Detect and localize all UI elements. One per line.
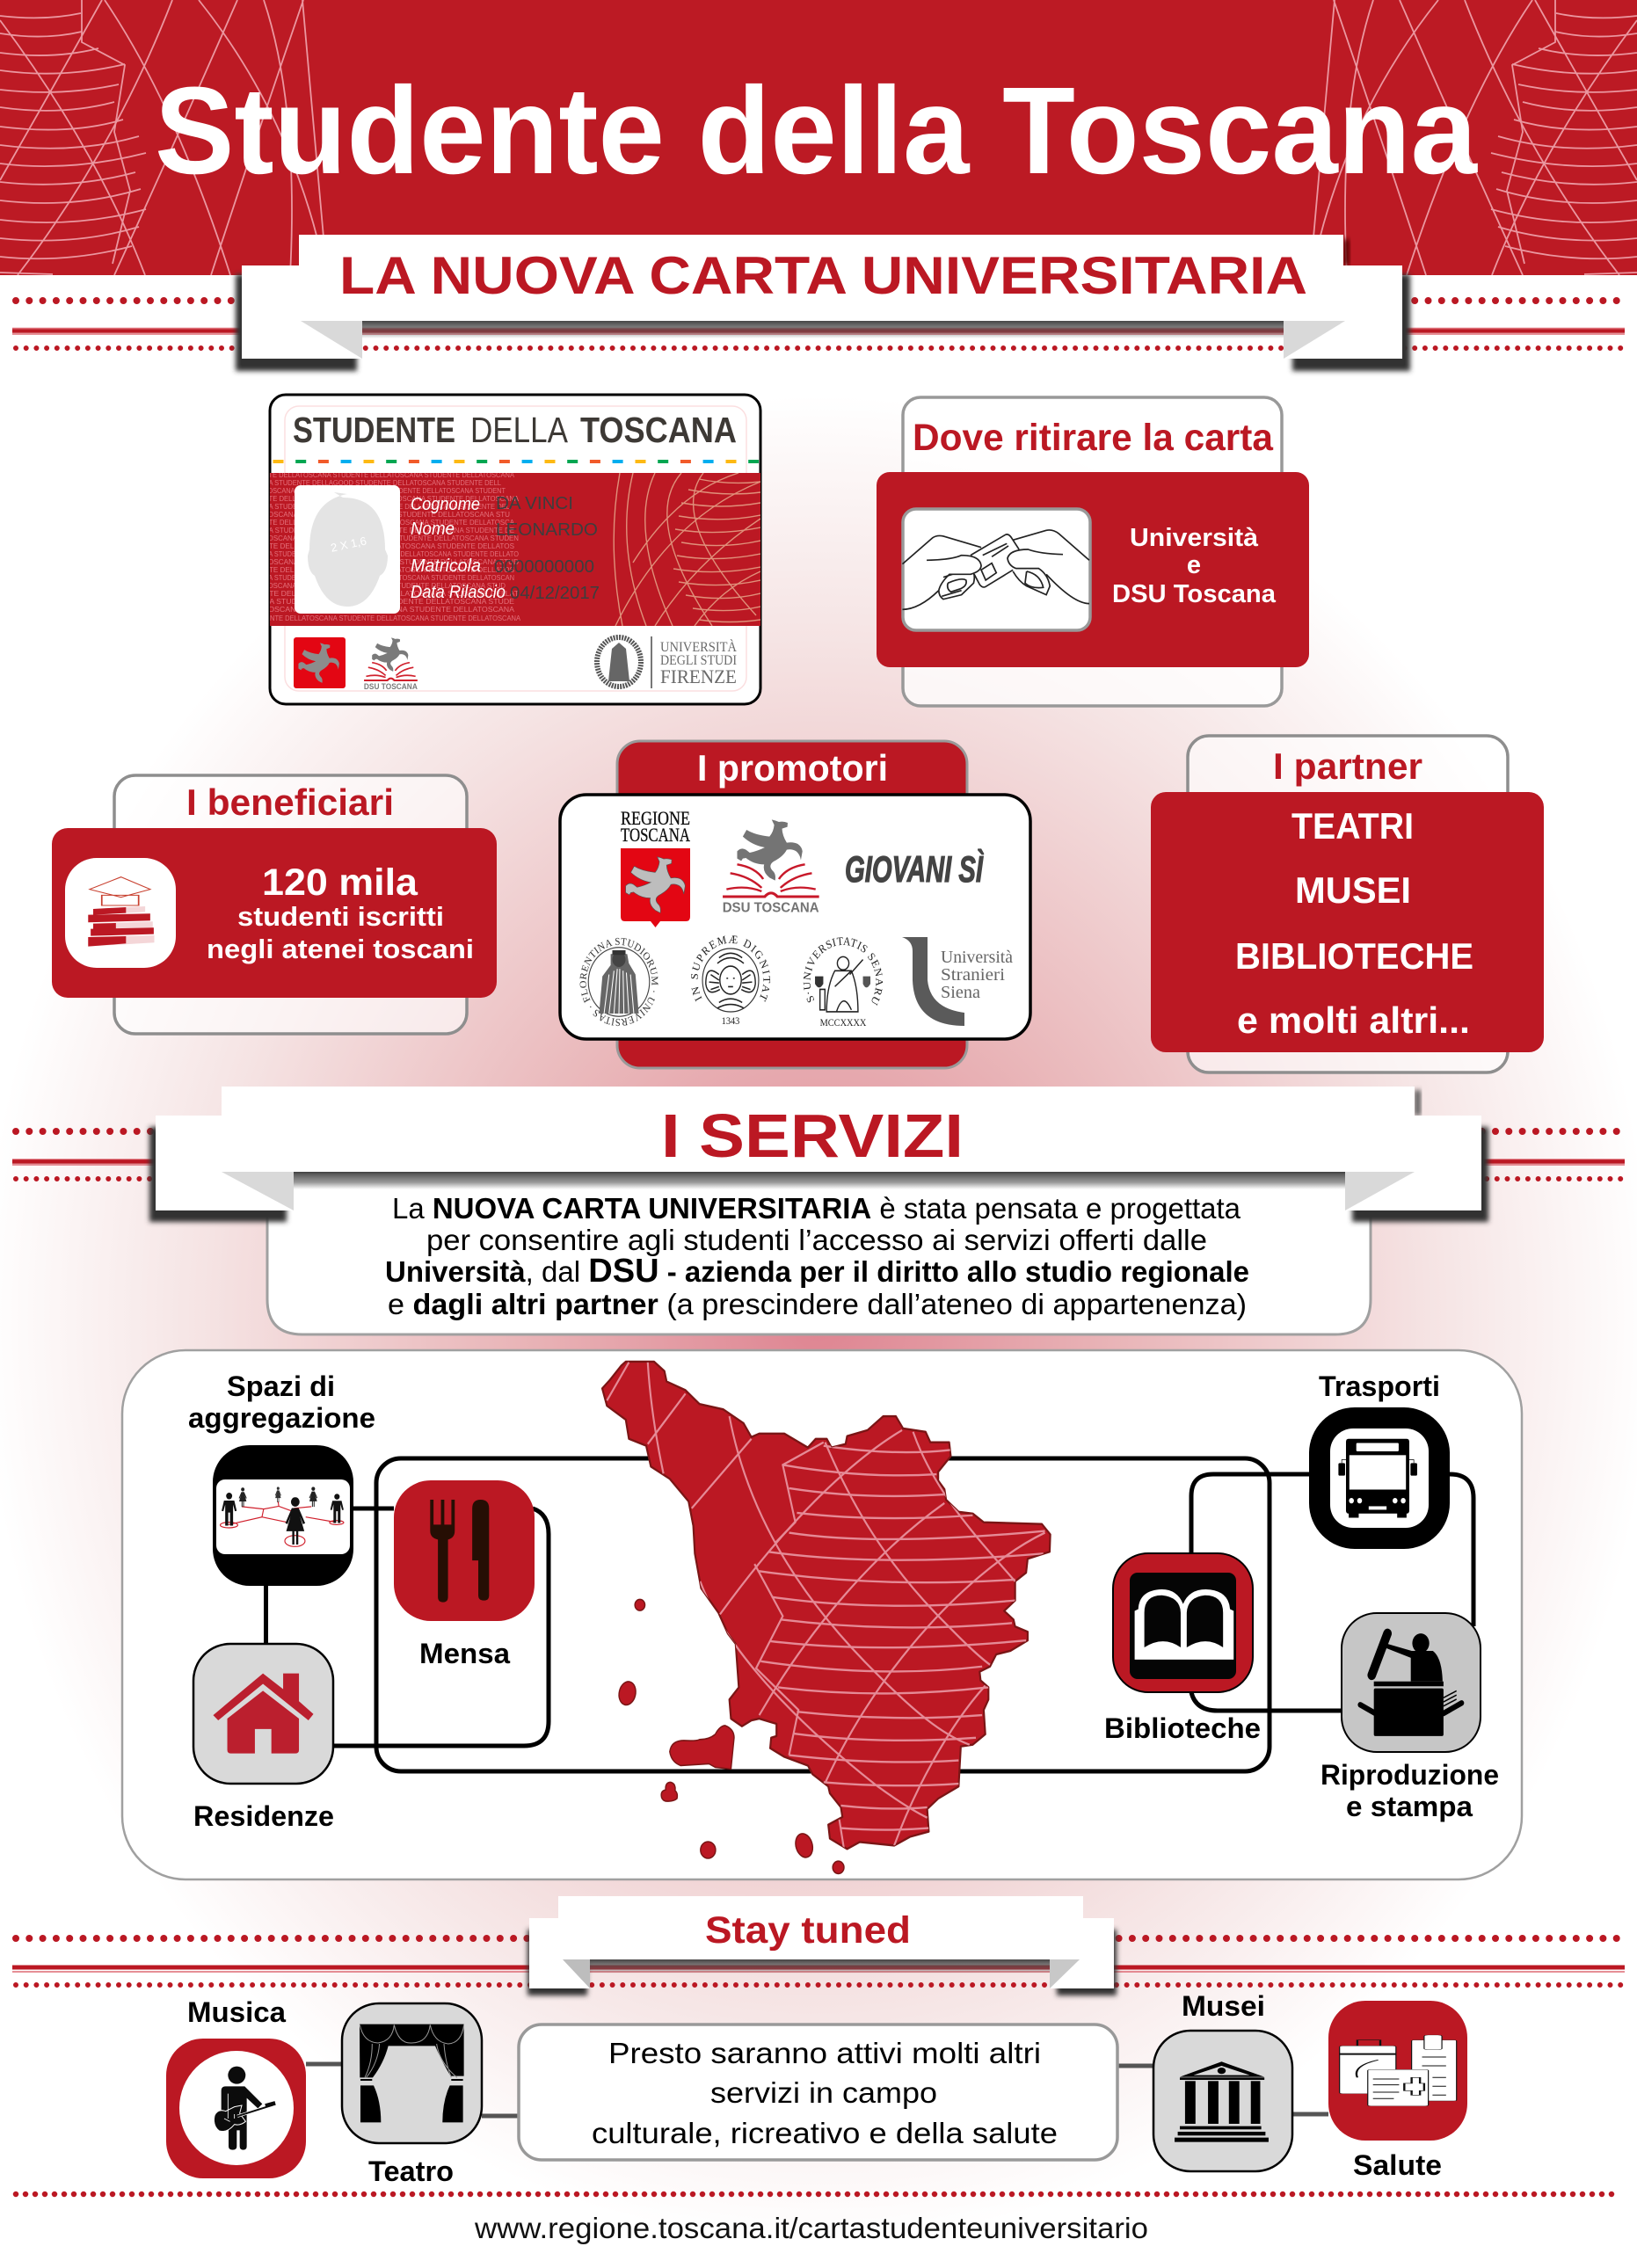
banner: stay tuned: Stay tuned [705,1909,911,1952]
service: musei [1153,1990,1292,2171]
service: mensa [394,1480,535,1669]
service: salute [1328,2001,1467,2181]
card heading [293,410,737,450]
service: spazi di aggregazione: Spazi di [227,1370,335,1402]
card heading: TOSCANA [580,410,737,450]
callout: presto saranno attivi [519,2024,1117,2160]
card fields [411,494,600,603]
logo: universita stranieri siena: Siena [941,983,980,1002]
card microtext: NTE DELLATOSCANA STUDENTE DELLATOSCANA STUDENTE DELLATOS [264,542,514,550]
logo: regione toscana [621,807,690,927]
card logo: dsu toscana [364,637,418,691]
logo: seal siena: S·UNIVERSITATIS SENARUM [804,937,883,1006]
card globe pattern [614,473,760,626]
card microtext: NTE DELLATOSCANA STUDENTE DELLATOSCANA STUDENTE DELLATOSCANA [264,471,515,479]
connectors [266,1458,1473,1771]
icon: hands holding card [902,509,1090,630]
card heading: STUDENTE [293,410,455,450]
card microtext: TOSCANA STUDENTE DELLATOSCANA STUDENTE DELLATOSCANA STUD [264,558,519,566]
callout: presto saranno attivi: servizi in campo [710,2076,937,2109]
panel: i partner: TEATRI [1291,805,1414,847]
service: teatro: Teatro [368,2155,454,2187]
service: mensa: Mensa [419,1638,510,1669]
panel: i beneficiari: 120 mila [262,861,418,904]
panel: services map [122,1350,1522,1879]
panel: i partner [1151,736,1544,1072]
text panel: nuova carta description: Università, dal DSU - azienda per il diritto allo studio regionale [385,1253,1249,1290]
banner: la nuova carta universitaria: LA NUOVA CARTA UNIVERSITARIA [339,246,1307,305]
service: trasporti [1309,1370,1450,1549]
card logo: regione [294,637,346,688]
panel: i partner: BIBLIOTECHE [1235,935,1473,977]
banner: i servizi: I SERVIZI [661,1101,964,1170]
banner: i servizi [149,1087,1488,1222]
card microtext: TOSCANA STUDENTE DELLATOSCANA STUDENTE DELLATOSCANA STUDENT [264,487,506,495]
header band [0,0,1637,275]
panel: dove ritirare la carta: Dove ritirare la carta [913,417,1274,459]
logo: seal firenze: FLORENTINA STUDIORUM · UNIVERSITAS · [580,937,658,1027]
service: musica: Musica [187,1996,286,2028]
logo: dsu toscana [723,819,819,916]
panel: i beneficiari: negli atenei toscani [207,934,474,964]
card microtext [264,471,521,622]
card fields: LEONARDO [496,520,598,540]
logo: seal siena: MCCXXXX [820,1017,866,1029]
service: riproduzione e stampa: e stampa [1346,1791,1473,1822]
map of toscana [602,1362,1051,1873]
logo: seal pisa [691,935,770,1027]
card heading: DELLA [470,410,569,450]
callout: presto saranno attivi: Presto saranno attivi molti altri [608,2037,1041,2069]
card fields: 04/12/2017 [510,584,600,603]
service: spazi di aggregazione: aggregazione [188,1402,375,1434]
panel: i beneficiari [52,775,497,1034]
service: musei: Musei [1182,1990,1265,2022]
card microtext: NA STUDENTE DELLATOSCANA STUDENTE DELLATOSCANA STUDENTE DE [264,527,514,534]
logo: seal pisa: IN SUPREMÆ DIGNITATIS [691,935,770,1002]
logo: giovani si: GIOVANI SÌ [845,848,984,890]
text panel: nuova carta description: per consentire agli studenti l’accesso ai servizi offerti dalle [426,1224,1207,1256]
callout: presto saranno attivi: culturale, ricreativo e della salute [592,2117,1058,2149]
service: riproduzione e stampa [1321,1613,1499,1822]
title: Studente della Toscana [155,61,1479,200]
card microtext: NA STUDENTE DELLATOSCANA STUDENTE DELLATOSCANA STUDENTE DEL [264,503,511,511]
text panel: nuova carta description: e dagli altri partner (a prescindere dall’ateneo di appartenenza) [388,1288,1247,1320]
panel: i promotori [558,740,1032,1069]
service: musica [166,1996,306,2178]
logo: universita stranieri siena: Università [941,948,1013,967]
card fields: DA VINCI [496,494,573,513]
panel: dove ritirare la carta: Università [1130,524,1259,552]
card microtext: NA STUDENTE DELLAGOOD STUDENTE DELLATOSCANA STUDENTE DELL [264,479,502,487]
banner: stay tuned [527,1896,1117,1995]
service: spazi di aggregazione [188,1370,375,1586]
logo: regione toscana: REGIONE [621,807,690,829]
panel: dove ritirare la carta [877,397,1309,706]
card microtext: NTE DELLATOSCANA STUDENTE DELLATOSCANA STUDENTE DELLAT [264,590,519,598]
card microtext: NA STUDENTE DELLATOSCANA STUDENTE DELLATOSCANA STUDE [264,598,514,606]
service: residenze: Residenze [193,1800,334,1832]
card logo: universita firenze [597,636,738,688]
panel: i promotori: I promotori [697,747,888,789]
panel: i partner: MUSEI [1295,869,1411,911]
logo: universita stranieri siena: Stranieri [941,965,1005,985]
card microtext: NA STUDENTE DELLATOSCANA STUDENTE DELLATOSCANA STUDENTE DELLATO [264,550,519,558]
card logo: dsu toscana: DSU TOSCANA [364,682,418,691]
card photo placeholder [295,485,400,614]
service: teatro [342,2003,482,2187]
student card [264,395,760,704]
card microtext: TOSCANA STUDENTE DELLATOSCANA STUDENTE DELLATOSCANA STUD [264,582,506,590]
panel: dove ritirare la carta: DSU Toscana [1112,580,1277,608]
logo: dsu toscana: DSU TOSCANA [723,901,819,916]
panel: i beneficiari: studenti iscritti [237,901,444,932]
panel: dove ritirare la carta: e [1187,551,1201,579]
card microtext: NA STUDENTE MBGOOD STUDENTE DELLATOSCANA STUDENTE DELLATOSCAN [264,574,514,582]
logo: regione toscana: TOSCANA [621,824,690,846]
card logo: universita firenze: DEGLI STUDI [660,653,737,668]
banner: la nuova carta universitaria [236,235,1410,371]
card microtext: NTE DELLATOSCANA STUDENTE DELLATOSCANA STUDENTE DELLATOSCANA [264,495,520,503]
service: residenze [193,1644,334,1832]
card logo: universita firenze: FIRENZE [660,665,737,687]
logo: universita stranieri siena [902,937,1013,1026]
card microtext: NTE DELLATOSCANA STUDENTE DELLATOSCANA STUDENTE DELLATOSCANA [270,614,521,622]
card logo: universita firenze: UNIVERSITÀ [660,640,738,655]
panel: i beneficiari: I beneficiari [186,781,394,823]
service: biblioteche [1104,1553,1261,1744]
service: biblioteche: Biblioteche [1104,1712,1261,1744]
text panel: nuova carta description [267,1172,1371,1334]
card fields: Cognome [411,495,480,514]
card photo placeholder: 2 X 1,6 [330,534,367,555]
service: riproduzione e stampa: Riproduzione [1321,1759,1499,1791]
service: salute: Salute [1353,2149,1442,2181]
card microtext: NTE DELLATOSCANA STUDENTE DELLATOSCANA STUDENTE DELLATOSCA [264,519,515,527]
card microtext: TOSCANA STUDENTE DELLATOSCANA STUDENTE DELLATOSCANA STUDEN [264,534,519,542]
card fields: Nome [411,520,455,539]
text panel: nuova carta description: La NUOVA CARTA UNIVERSITARIA è stata pensata e progettata [392,1192,1241,1225]
card microtext: TOSCANA STUDENTE DELLATOSCANA STUDENTE DELLATOSCANA STU [264,511,510,519]
icon: books and graduation cap [65,858,176,968]
logo: seal pisa: 1343 [722,1015,740,1027]
service: trasporti: Trasporti [1319,1370,1440,1402]
card microtext: NTE DELLATOSCANA STUDENTE DELLATOSCANA STUDENTE DELLATOS [264,566,514,574]
panel: i partner: I partner [1273,745,1422,787]
card fields: Matricola [411,556,481,576]
card fields: Data Rilascio [411,583,506,602]
panel: i partner: e molti altri... [1237,1000,1470,1041]
footer url: www.regione.toscana.it/cartastudenteuniversitario [474,2212,1148,2244]
card microtext: TOSCANA STUDENTE DELLATOSCANA STUDENTE DELLATOSCANA [264,606,515,614]
card fields: 0000000000 [494,557,594,577]
